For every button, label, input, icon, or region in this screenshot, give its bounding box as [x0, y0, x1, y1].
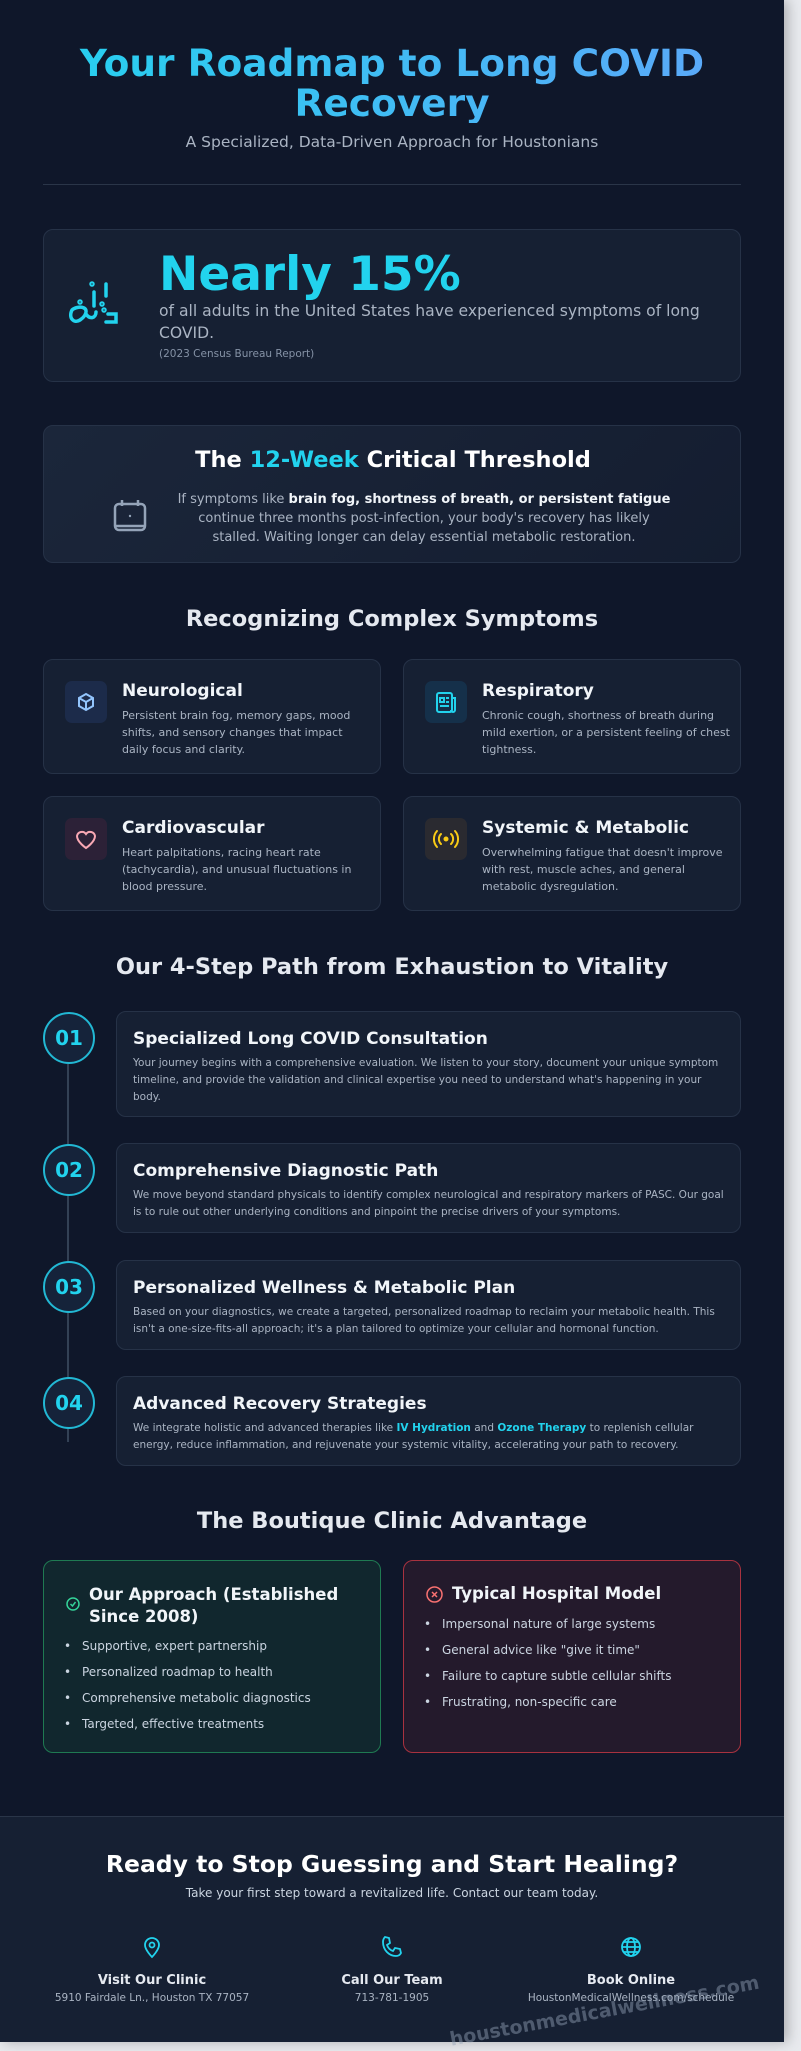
step number [43, 1261, 95, 1313]
card: respiratory [403, 659, 741, 774]
panel: hospital model: General advice like "give it time" [442, 1643, 640, 1657]
title [0, 43, 784, 123]
step 4 [43, 1376, 741, 1466]
footer [0, 1816, 784, 2042]
contact: online: HoustonMedicalWellness.com/schedule [528, 1992, 734, 2004]
title: Recovery [294, 81, 490, 125]
step card [116, 1260, 741, 1350]
icon: x [426, 1586, 443, 1603]
step number [43, 1012, 95, 1064]
step number [43, 1377, 95, 1429]
stat number: Nearly 15% [159, 247, 461, 302]
card: cardiovascular: Heart palpitations, racing heart rate (tachycardia), and unusual fluctuations in blood pressure. [122, 846, 351, 893]
icon: heart [65, 818, 107, 860]
icon: globe [621, 1937, 641, 1957]
card: systemic: Overwhelming fatigue that doesn't improve with rest, muscle aches, and general metabolic dysregulation. [482, 846, 723, 893]
panel: our approach: Targeted, effective treatments [82, 1717, 264, 1731]
icon: lungs [425, 681, 467, 723]
panel: hospital model: Failure to capture subtle cellular shifts [442, 1669, 671, 1683]
step card: We move beyond standard physicals to identify complex neurological and respiratory markers of PASC. Our goal is to rule out other underlying conditions and pinpoint the precise drivers of your symptoms. [133, 1189, 724, 1218]
step card: Advanced Recovery Strategies [133, 1394, 427, 1414]
contact: phone: Call Our Team [341, 1973, 443, 1988]
panel: our approach: Comprehensive metabolic diagnostics [82, 1691, 311, 1705]
panel: hospital model [403, 1560, 741, 1753]
step card [116, 1011, 741, 1117]
step 2 [43, 1143, 741, 1233]
subtitle: A Specialized, Data-Driven Approach for Houstonians [186, 133, 598, 151]
cta subtext: Take your first step toward a revitalized life. Contact our team today. [186, 1886, 598, 1900]
step card [116, 1376, 741, 1466]
step number: 01 [55, 1026, 83, 1050]
step 3 [43, 1260, 741, 1350]
panel: our approach [43, 1560, 381, 1753]
heading: The 12-Week Critical Threshold [195, 447, 591, 473]
panel: statistic card [43, 229, 741, 382]
step card [116, 1143, 741, 1233]
panel: our approach: Supportive, expert partnership [82, 1639, 267, 1653]
watermark: houstonmedicalwellness.com [448, 1972, 761, 2051]
icon: pin [144, 1937, 160, 1958]
step number [43, 1144, 95, 1196]
heading: Since 2008) [89, 1607, 198, 1626]
card: neurological: Persistent brain fog, memory gaps, mood shifts, and sensory changes that impact daily focus and clarity. [122, 709, 350, 756]
step card: Personalized Wellness & Metabolic Plan [133, 1278, 515, 1298]
step 1 [43, 1011, 741, 1117]
contact: online [528, 1937, 734, 2004]
icon: phone [382, 1936, 402, 1957]
panel: 12-week threshold [43, 425, 741, 563]
step card: Your journey begins with a comprehensive evaluation. We listen to your story, document your unique symptom timeline, and provide the validation and clinical expertise you need to understand what's happening in your body. [133, 1057, 718, 1103]
step number: 03 [55, 1275, 83, 1299]
heading: steps: Our 4-Step Path from Exhaustion to Vitality [116, 954, 668, 980]
panel: hospital model: Frustrating, non-specific care [442, 1695, 617, 1709]
step card: Comprehensive Diagnostic Path [133, 1161, 438, 1181]
contact: phone [341, 1936, 443, 2004]
heading: Typical Hospital Model [452, 1584, 661, 1603]
heading: symptoms: Recognizing Complex Symptoms [186, 606, 598, 632]
contact: online: Book Online [587, 1973, 675, 1988]
panel: our approach: Personalized roadmap to health [82, 1665, 273, 1679]
title: Your Roadmap to Long COVID [80, 41, 704, 85]
card: systemic [403, 796, 741, 911]
icon: calendar [114, 500, 146, 532]
step number: 02 [55, 1158, 83, 1182]
heading [89, 1585, 338, 1626]
card: neurological: Neurological [122, 681, 243, 701]
stat description: of all adults in the United States have experienced symptoms of long COVID. [159, 302, 700, 342]
contact: clinic [55, 1937, 249, 2004]
card: cardiovascular: Cardiovascular [122, 818, 265, 838]
card: respiratory: Respiratory [482, 681, 594, 701]
icon: statistic glyph [68, 281, 118, 324]
icon: signal [425, 818, 467, 860]
icon: check [66, 1597, 80, 1611]
contact: phone: 713-781-1905 [355, 1992, 429, 2004]
step card: Specialized Long COVID Consultation [133, 1029, 488, 1049]
cta heading: Ready to Stop Guessing and Start Healing? [106, 1850, 678, 1878]
step number: 04 [55, 1391, 83, 1415]
heading: boutique: The Boutique Clinic Advantage [197, 1508, 587, 1534]
step card: We integrate holistic and advanced therapies like IV Hydration and Ozone Therapy to replenish cellular energy, reduce inflammation, and rejuvenate your systemic vitality, accelerating your path to recovery. [133, 1422, 693, 1451]
contact: clinic: Visit Our Clinic [98, 1973, 206, 1988]
card: cardiovascular [43, 796, 381, 911]
card: neurological [43, 659, 381, 774]
card: respiratory: Chronic cough, shortness of breath during mild exertion, or a persistent feeling of chest tightness. [482, 709, 730, 756]
source: (2023 Census Bureau Report) [159, 348, 314, 360]
contact: clinic: 5910 Fairdale Ln., Houston TX 77057 [55, 1992, 249, 2004]
heading: Our Approach (Established [89, 1585, 338, 1604]
step card: Based on your diagnostics, we create a targeted, personalized roadmap to reclaim your metabolic health. This isn't a one-size-fits-all approach; it's a plan tailored to optimize your cellular and hormonal function. [133, 1306, 715, 1335]
text: If symptoms like brain fog, shortness of breath, or persistent fatigue continue three months post-infection, your body's recovery has likely stalled. Waiting longer can delay essential metabolic restoration. [178, 492, 670, 545]
panel: hospital model: Impersonal nature of large systems [442, 1617, 655, 1631]
card: systemic: Systemic & Metabolic [482, 818, 689, 838]
icon: brain [65, 681, 107, 723]
